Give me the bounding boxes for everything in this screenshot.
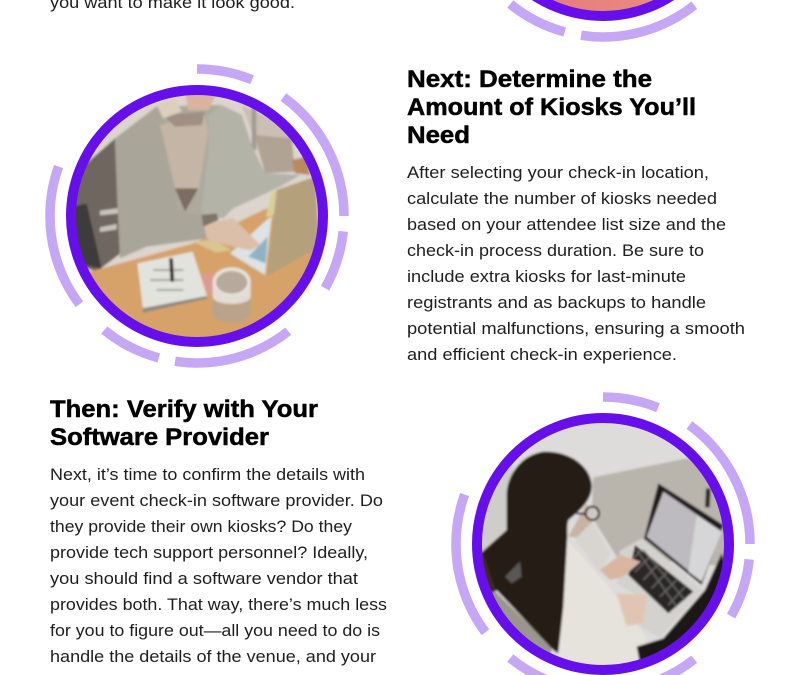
text block: provider body: [50, 465, 387, 666]
heading: Then: [50, 396, 318, 451]
panel: intro ending: [50, 0, 750, 37]
heading: Next: Need: [407, 122, 470, 149]
panel: determine kiosks: [50, 66, 745, 364]
text block: provider body: you should find a software vendor that: [50, 569, 358, 588]
text block: provider body: provide tech support personnel? Ideally,: [50, 543, 368, 562]
heading: Then: Software Provider: [50, 424, 269, 451]
text block: kiosks body: After selecting your check-in location,: [407, 163, 709, 182]
text block: provider body: Next, it’s time to confirm the details with: [50, 465, 365, 484]
text block: kiosks body: calculate the number of kiosks needed: [407, 189, 717, 208]
heading: Then: Then: Verify with Your: [50, 396, 318, 423]
text block: provider body: they provide their own kiosks? Do they: [50, 517, 353, 536]
text block: kiosks body: potential malfunctions, ensuring a smooth: [407, 319, 745, 338]
text block: kiosks body: and efficient check-in experience.: [407, 345, 677, 364]
heading: Next: Amount of Kiosks You’ll: [407, 94, 696, 121]
decorative dashed ring: provider photo: [456, 397, 750, 675]
text block: provider body: provides both. That way, there’s much less: [50, 595, 387, 614]
text block: kiosks body: based on your attendee list size and the: [407, 215, 726, 234]
decorative dashed ring: kiosks photo: [50, 69, 344, 363]
text block: provider body: handle the details of the venue, and your: [50, 647, 376, 666]
text block: kiosks body: registrants and as backups to handle: [407, 293, 706, 312]
text block: kiosks body: include extra kiosks for last-minute: [407, 267, 686, 286]
text block: kiosks body: check-in process duration. Be sure to: [407, 241, 704, 260]
image: woman working at laptop on table: [67, 87, 327, 350]
text block: provider body: your event check-in software provider. Do: [50, 491, 383, 510]
panel: verify with provider: [50, 396, 750, 675]
heading: Next: [407, 66, 696, 149]
text block: provider body: for you to figure out—all you need to do is: [50, 621, 380, 640]
heading: Next: Next: Determine the: [407, 66, 652, 93]
text block: kiosks body: [407, 163, 745, 364]
image: woman with long hair using laptop: [477, 418, 737, 675]
image: top circular photo: [507, 0, 698, 42]
